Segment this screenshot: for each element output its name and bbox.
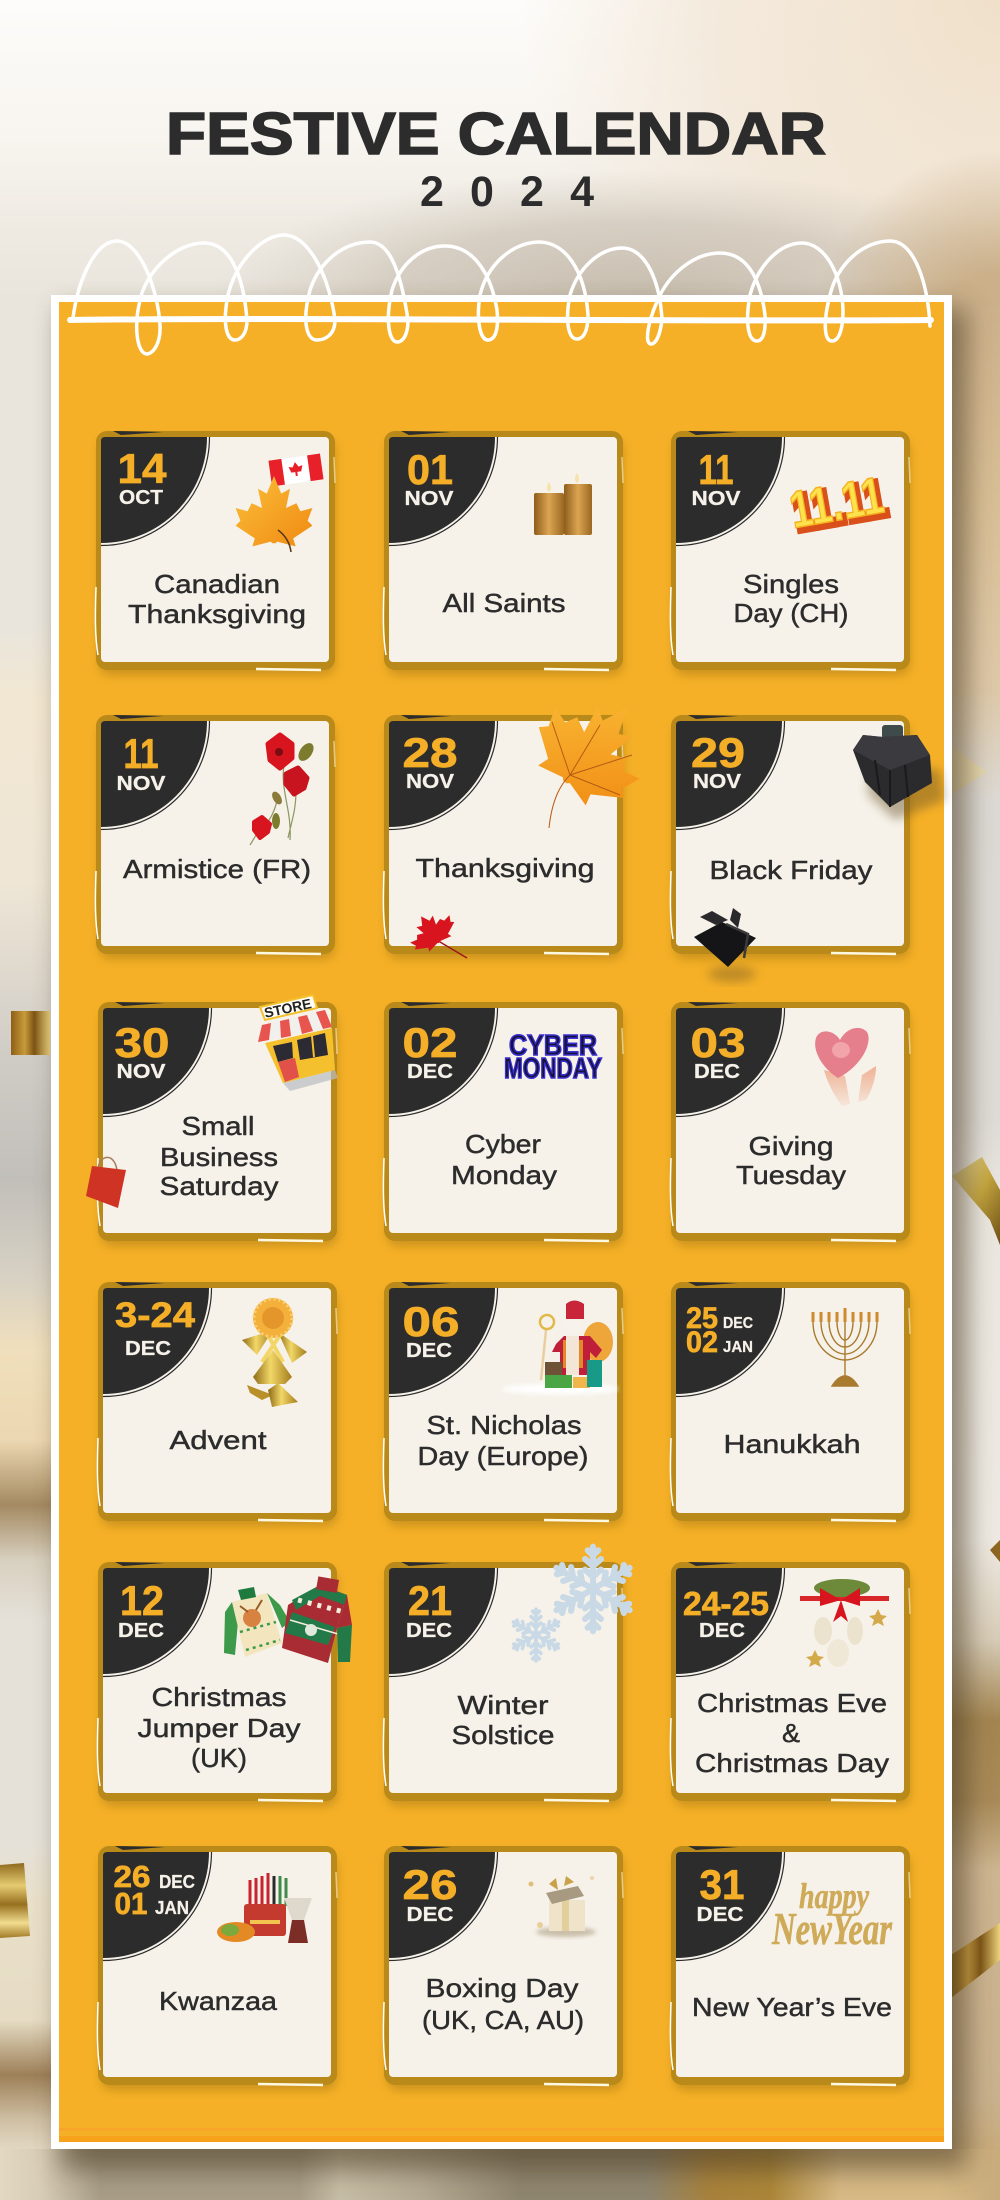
icon: bow and ornaments [800, 1579, 889, 1667]
date badge: 02 DEC: 02 [402, 1019, 458, 1066]
icon: St. Nicholas with gifts [502, 1300, 618, 1394]
date badge: 3-24 DEC [103, 1288, 212, 1396]
card: St. Nicholas Day [383, 1282, 623, 1526]
ribbon: gold right lower [951, 1923, 1000, 1998]
label: Day (Europe) [418, 1441, 588, 1471]
date badge: 3-24 DEC: 3-24 [115, 1296, 196, 1335]
date badge: 30 NOV: 30 [114, 1019, 170, 1066]
label: Business [160, 1142, 278, 1172]
date badge: 25 DEC – 02 JAN: DEC [723, 1315, 753, 1332]
date badge: 30 NOV [103, 1008, 212, 1116]
date badge: 01 NOV: 01 [407, 446, 453, 493]
card: Christmas Eve & Christmas Day [670, 1562, 910, 1806]
label: Thanksgiving [128, 599, 306, 629]
icon: golden bells [242, 1298, 307, 1407]
date badge: 03 DEC: DEC [694, 1061, 740, 1083]
date badge: 11 NOV: NOV [692, 488, 741, 510]
ribbon: small right [990, 1540, 1000, 1562]
card: Winter Solstice [383, 1547, 634, 1806]
date badge: 25 DEC – 02 JAN: 02 [686, 1326, 718, 1359]
date badge: 02 DEC: DEC [407, 1061, 453, 1083]
date badge: 21 DEC: DEC [406, 1620, 452, 1642]
date badge: 28 NOV: 28 [402, 729, 458, 776]
ribbon: gold left upper [11, 1011, 50, 1055]
date badge: 12 DEC: 12 [120, 1577, 164, 1624]
icon: snowflakes [511, 1547, 634, 1661]
label: Cyber [465, 1129, 541, 1159]
card: New Year's Eve [670, 1846, 910, 2090]
icon: Happy New Year lettering [771, 1876, 893, 1954]
label: Canadian [154, 569, 280, 599]
label [128, 569, 306, 629]
date badge: 25 DEC – 02 JAN: JAN [723, 1339, 753, 1356]
icon: poppies [250, 735, 317, 845]
date badge: 28 NOV [389, 721, 498, 830]
label: Boxing Day [426, 1973, 578, 2003]
label [160, 1111, 278, 1201]
icon: Happy New Year lettering: NewYear [771, 1903, 893, 1954]
icon: heart in hands [815, 1028, 876, 1106]
date badge: 26 DEC – 01 JAN [103, 1852, 212, 1960]
date badge: 30 NOV: NOV [116, 1061, 166, 1083]
ribbon: gold right middle [952, 1157, 1000, 1245]
icon: 11.11: 11.11 [785, 466, 888, 540]
title: FESTIVE CALENDAR [166, 101, 826, 167]
icon: open gift box [528, 1876, 596, 1937]
date badge: 03 DEC [676, 1008, 784, 1116]
label: Monday [451, 1160, 557, 1190]
card: Giving Tuesday [670, 1002, 910, 1246]
label: Giving [748, 1131, 834, 1161]
label: Day (CH) [734, 598, 848, 628]
icon: black gift large [853, 725, 945, 820]
icon: maple leaf and Canadian flag [236, 454, 324, 552]
date badge: 14 OCT [101, 437, 210, 546]
date badge: 31 DEC: 31 [700, 1861, 744, 1908]
date badge: 25 DEC – 02 JAN: 25 [686, 1302, 718, 1335]
card: Small Business Saturday [86, 995, 338, 1246]
calendar panel [51, 295, 967, 2170]
label: All Saints [442, 588, 566, 618]
card: Black Friday [670, 715, 945, 982]
date badge: 14 OCT: OCT [119, 487, 163, 509]
label: & [782, 1718, 800, 1748]
label: (UK, CA, AU) [422, 2005, 584, 2035]
date badge: 29 NOV: 29 [691, 729, 745, 776]
subtitle: year: 2024 [420, 168, 594, 216]
label [422, 1973, 584, 2035]
date badge: 26 DEC – 01 JAN: 01 [114, 1886, 148, 1921]
date badge: 26 DEC – 01 JAN: JAN [155, 1898, 189, 1918]
date badge: 06 DEC: 06 [402, 1298, 460, 1345]
icon: black gift small [694, 908, 756, 982]
icon: store: STORE [263, 995, 313, 1021]
icon: orange maple leaf [520, 672, 669, 828]
ribbon: pale gold right triangle [950, 745, 987, 795]
date badge: 31 DEC [676, 1852, 784, 1960]
label [452, 1690, 554, 1750]
icon: Cyber Monday wordmark [504, 1030, 602, 1085]
date badge: 26 DEC: 26 [402, 1861, 458, 1908]
label: Christmas Day [695, 1748, 889, 1778]
date badge: 28 NOV: NOV [406, 771, 455, 793]
card: Advent [97, 1282, 337, 1526]
date badge: 3-24 DEC: DEC [125, 1338, 171, 1360]
icon: Cyber Monday wordmark: MONDAY [504, 1053, 602, 1085]
ribbon: gold left lower [0, 1863, 30, 1938]
label: Singles [743, 569, 839, 599]
card: All Saints [383, 431, 623, 675]
date badge: 29 NOV [676, 721, 784, 830]
card: Hanukkah [670, 1282, 910, 1526]
label [451, 1129, 557, 1190]
label: Christmas [152, 1682, 286, 1712]
card: Canadian Thanksgiving [95, 431, 335, 675]
date badge: 25 DEC – 02 JAN [676, 1288, 784, 1396]
date badge: 01 NOV [389, 437, 498, 546]
icon: Happy New Year lettering: happy [799, 1876, 870, 1916]
icon: red leaf [401, 903, 467, 958]
label: Jumper Day [138, 1713, 300, 1743]
date badge: 21 DEC: 21 [408, 1577, 452, 1624]
label: (UK) [191, 1743, 247, 1773]
date badge: 26 DEC: DEC [406, 1904, 454, 1926]
date badge: 11 NOV: 11 [124, 730, 158, 777]
label: New Year’s Eve [692, 1992, 892, 2022]
date badge: 11 NOV: NOV [116, 773, 166, 795]
label: Black Friday [710, 855, 872, 885]
label: Tuesday [736, 1160, 846, 1190]
label: Hanukkah [724, 1429, 860, 1459]
date badge: 11 NOV [101, 721, 210, 830]
label: St. Nicholas [426, 1410, 582, 1440]
icon: menorah [813, 1308, 877, 1386]
date badge: 03 DEC: 03 [690, 1019, 746, 1066]
card: Kwanzaa [97, 1846, 337, 2090]
label [734, 569, 848, 628]
date badge: 11 NOV [676, 437, 784, 546]
card: Singles Day [670, 431, 910, 675]
label: Winter [458, 1690, 549, 1720]
date badge: 26 DEC – 01 JAN: 26 [114, 1859, 150, 1894]
card: Armistice [95, 715, 335, 959]
date badge: 31 DEC: DEC [696, 1904, 744, 1926]
icon: kinara, drum and food [217, 1873, 312, 1943]
date badge: 26 DEC [389, 1852, 498, 1960]
label [695, 1688, 889, 1778]
date badge: 01 NOV: NOV [404, 488, 454, 510]
label: Thanksgiving [416, 853, 594, 883]
date badge: 14 OCT: 14 [118, 445, 167, 492]
card: Cyber Monday [383, 1002, 623, 1246]
card: Thanksgiving [383, 672, 669, 959]
date badge: 26 DEC – 01 JAN: DEC [159, 1872, 195, 1892]
label [418, 1410, 588, 1471]
date badge: 02 DEC [389, 1008, 498, 1116]
label: Kwanzaa [159, 1986, 278, 2016]
label [138, 1682, 300, 1773]
date badge: 24-25 DEC: DEC [699, 1620, 745, 1642]
label [736, 1131, 846, 1190]
label: Christmas Eve [697, 1688, 887, 1718]
icon: Cyber Monday wordmark: CYBER [509, 1030, 597, 1062]
label: Saturday [160, 1171, 278, 1201]
date badge: 06 DEC: DEC [406, 1340, 452, 1362]
date badge: 24-25 DEC [676, 1568, 784, 1676]
icon: store [258, 995, 338, 1091]
label: Armistice (FR) [123, 854, 311, 884]
date badge: 24-25 DEC: 24-25 [683, 1585, 769, 1622]
date badge: 21 DEC [389, 1568, 498, 1676]
icon: 11.11: 11.11 [789, 470, 892, 543]
spiral binding [70, 235, 931, 354]
date badge: 29 NOV: NOV [693, 771, 742, 793]
icon: candles [534, 473, 592, 535]
icon: red shopping bag [86, 1157, 126, 1208]
date badge: 06 DEC [389, 1288, 498, 1396]
icon: Christmas jumpers [224, 1576, 352, 1663]
date badge: 12 DEC [103, 1568, 212, 1676]
label: Solstice [452, 1720, 554, 1750]
date badge: 12 DEC: DEC [118, 1620, 164, 1642]
card: Boxing Day [383, 1846, 623, 2090]
label: Advent [170, 1425, 267, 1455]
card: Christmas Jumper Day [97, 1562, 352, 1806]
label: Small [182, 1111, 254, 1141]
date badge: 11 NOV: 11 [698, 446, 734, 493]
